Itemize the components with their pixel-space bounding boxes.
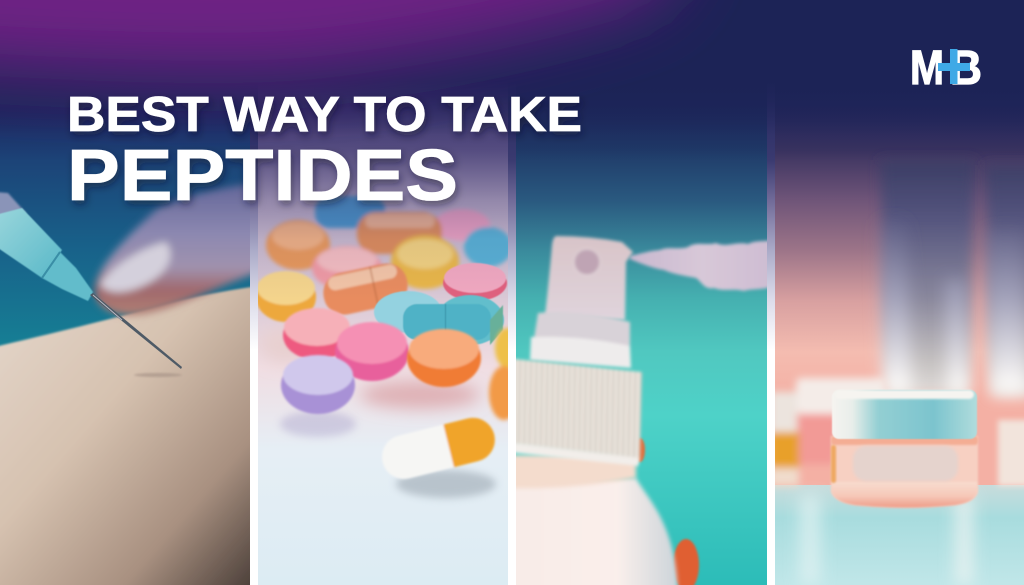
icon: finger	[95, 182, 270, 315]
icon: lilac tablet	[280, 355, 356, 437]
title line 2: PEPTIDES	[67, 136, 458, 216]
icon: peach capsule	[322, 262, 409, 316]
icon: fingers behind bottle	[635, 438, 699, 585]
icon: blurred tubes	[878, 160, 1024, 486]
icon: magenta tablet	[335, 322, 409, 381]
icon: pink right tablet	[443, 263, 507, 301]
icon: pink tablet	[283, 308, 351, 360]
title	[67, 87, 582, 216]
icon: orange tablet	[407, 329, 481, 387]
title line 1: BEST WAY TO TAKE	[67, 87, 582, 142]
top colour overlay	[0, 0, 1024, 135]
icon: yellow tablet	[256, 271, 316, 322]
panel: injection	[0, 92, 250, 585]
panel: oral pills	[258, 83, 508, 585]
icon: blue tablet and capsule	[374, 291, 504, 345]
logo: M	[910, 42, 944, 95]
panel tint	[775, 70, 1024, 160]
icon: cream jar	[831, 390, 978, 508]
panel: topical cream	[775, 83, 1024, 585]
gaps between panels	[250, 60, 775, 360]
icon: spray collar	[530, 312, 631, 368]
icon: spray mist	[630, 240, 775, 291]
icon: blurred small jars	[770, 378, 886, 486]
icon: pills background row	[266, 196, 512, 290]
panel tint	[516, 70, 767, 160]
icon: syringe	[0, 192, 182, 377]
panel 1 tint	[0, 70, 258, 160]
logo	[910, 42, 982, 95]
icon: spray nozzle	[545, 236, 633, 320]
icon: skin surface	[0, 285, 265, 585]
icon: reflections on table	[800, 495, 973, 585]
panel tint	[258, 85, 508, 268]
logo: B	[950, 42, 982, 95]
icon: side pills	[486, 325, 508, 423]
icon: white and orange capsule	[377, 413, 500, 498]
panel: nasal spray	[516, 83, 767, 585]
icon: ribbed cap	[505, 358, 642, 466]
icon: pill shadows	[260, 327, 480, 409]
icon: bottle body	[505, 478, 678, 585]
